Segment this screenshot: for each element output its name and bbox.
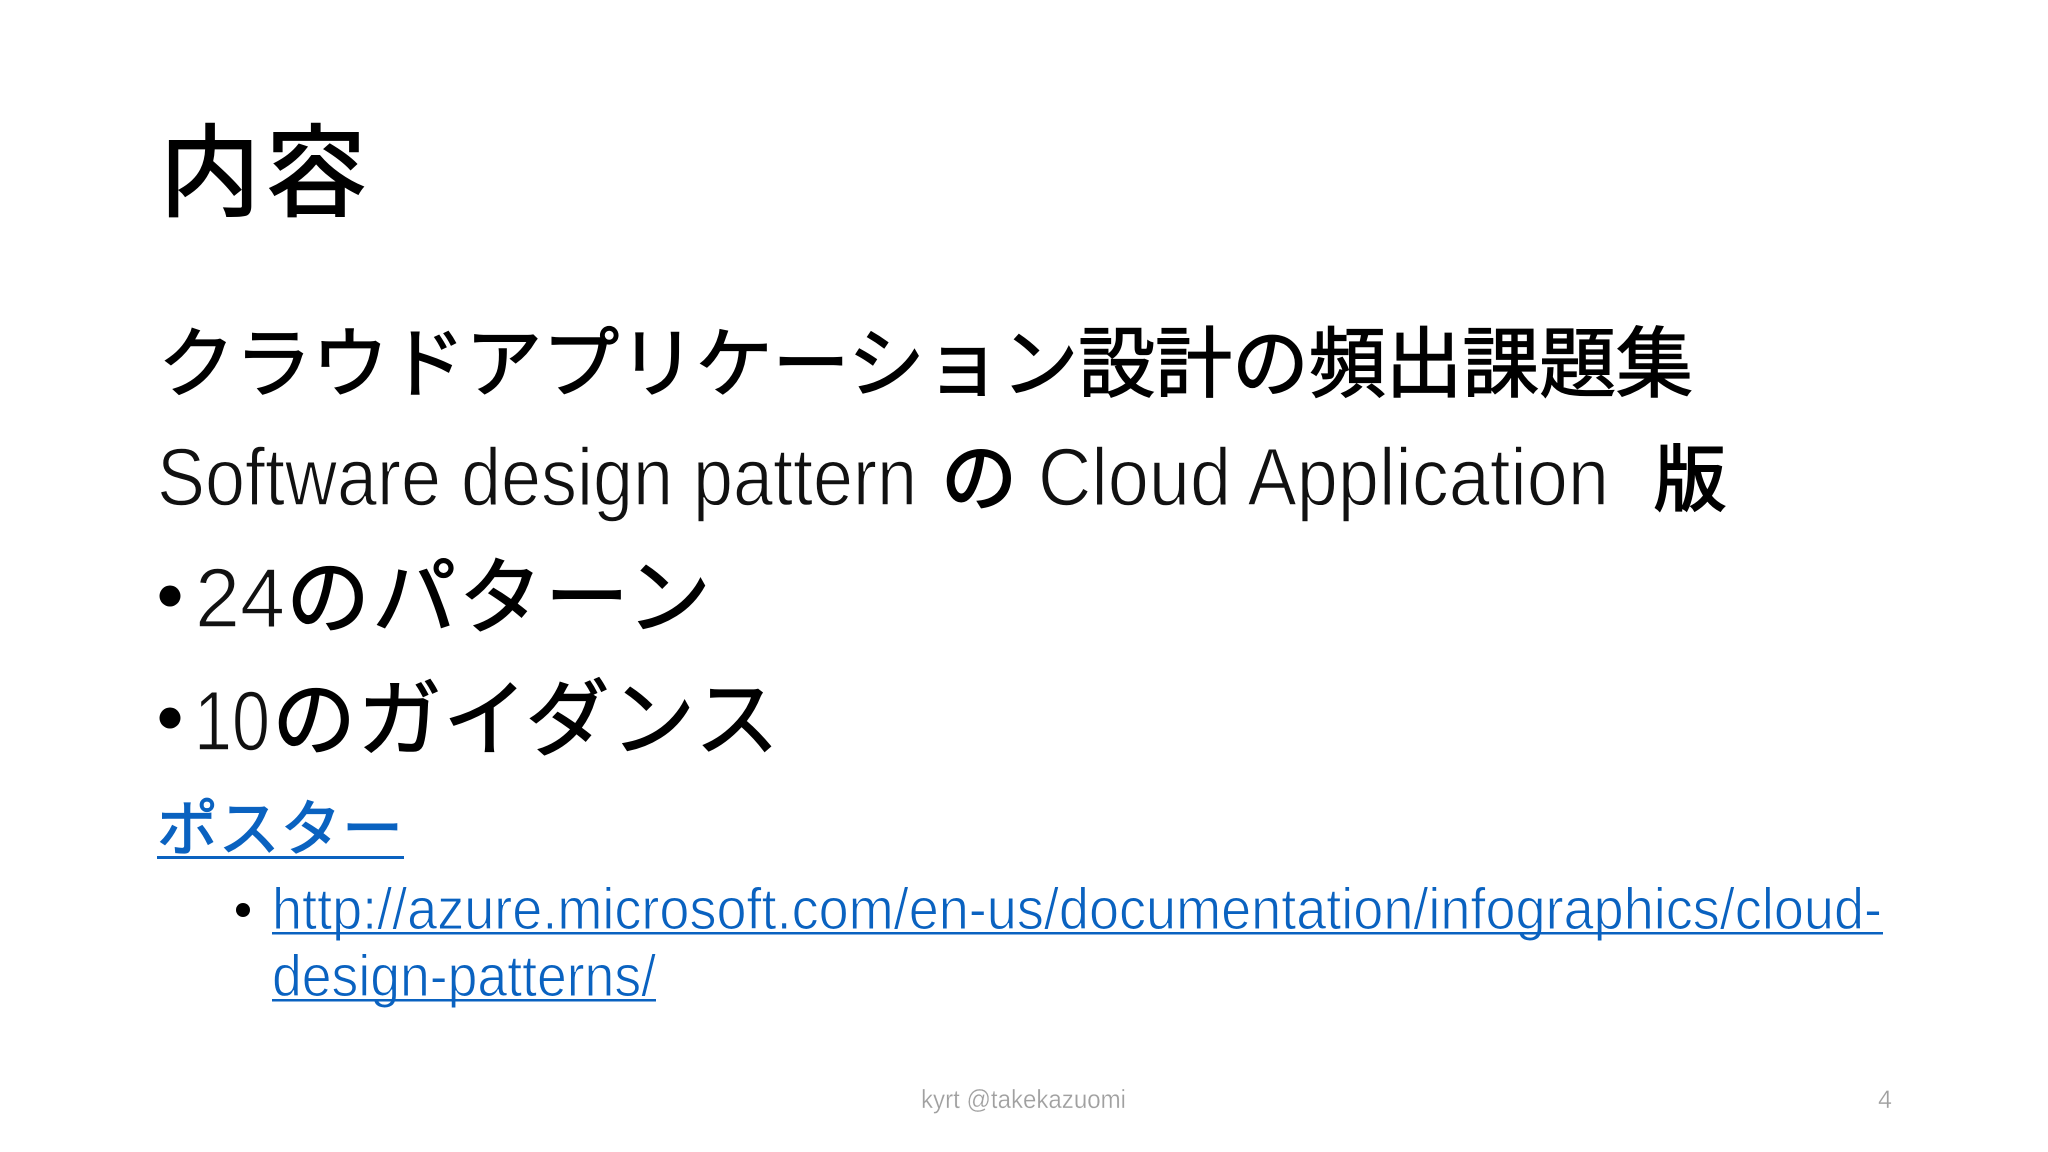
slide number: 4 <box>1878 1086 1892 1114</box>
subheading: software design pattern: の <box>941 437 1017 522</box>
title: 内容 <box>160 118 366 230</box>
link: poster: ポスター <box>157 795 403 863</box>
bullet: 24 patterns: のパターン <box>286 551 711 645</box>
bullet: 24 patterns: 24 <box>195 551 285 645</box>
footer text: kyrt @takekazuomi <box>921 1084 1126 1114</box>
subheading: software design pattern <box>157 432 1726 523</box>
poster URL bullet: http://azure.microsoft.com/en-us/documentation/infographics/cloud- <box>272 877 1882 942</box>
heading: cloud application design problems: クラウドアプリケーション設計の頻出課題集 <box>158 322 1693 408</box>
poster URL bullet: design-patterns/ <box>272 944 657 1009</box>
bullet: 10 guidance items: のガイダンス <box>272 673 779 767</box>
poster URL bullet <box>236 877 1883 1009</box>
bullet: 10 guidance items: 10 <box>194 674 270 768</box>
subheading: software design pattern: Software design pattern <box>157 432 917 523</box>
subheading: software design pattern: Cloud Application <box>1038 432 1609 523</box>
subheading: software design pattern: 版 <box>1654 441 1726 521</box>
